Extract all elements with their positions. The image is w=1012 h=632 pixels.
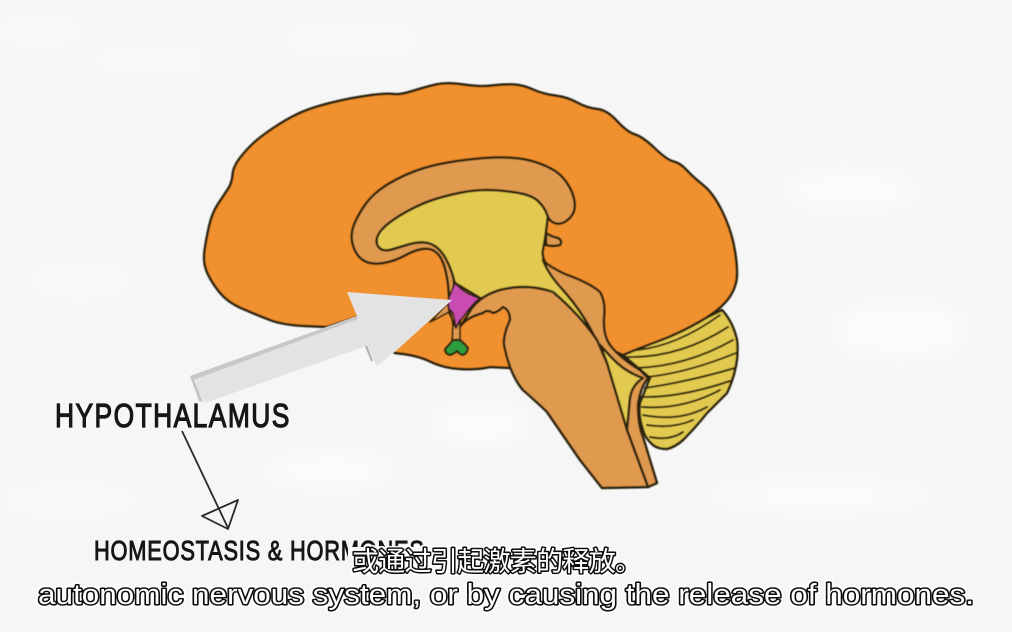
third ventricle yellow region bbox=[372, 175, 607, 362]
pointer arrow bbox=[190, 292, 452, 403]
sliver beside stalk bbox=[430, 303, 449, 322]
subtitles bbox=[38, 547, 974, 611]
fornix strip bbox=[543, 260, 657, 487]
cerebrum bbox=[204, 83, 737, 369]
arrow: hand-drawn down arrow bbox=[182, 431, 238, 529]
subtitle: english: autonomic nervous system, or by causing the release of hormones. bbox=[38, 579, 974, 611]
hypothalamus magenta bbox=[447, 283, 480, 328]
pituitary stalk bbox=[447, 308, 460, 341]
corpus callosum bbox=[352, 157, 575, 298]
label: homeostasis and hormones: HOMEOSTASIS & HORMONES bbox=[94, 535, 424, 567]
fourth ventricle bbox=[600, 345, 643, 430]
brainstem bbox=[458, 287, 648, 488]
cerebellum bbox=[623, 310, 738, 449]
small tab bbox=[546, 233, 561, 246]
pituitary green bbox=[445, 340, 468, 355]
heading: hypothalamus: HYPOTHALAMUS bbox=[55, 398, 289, 435]
subtitle: chinese: 或通过引起激素的释放。 bbox=[352, 547, 642, 577]
brain diagram bbox=[204, 83, 738, 488]
